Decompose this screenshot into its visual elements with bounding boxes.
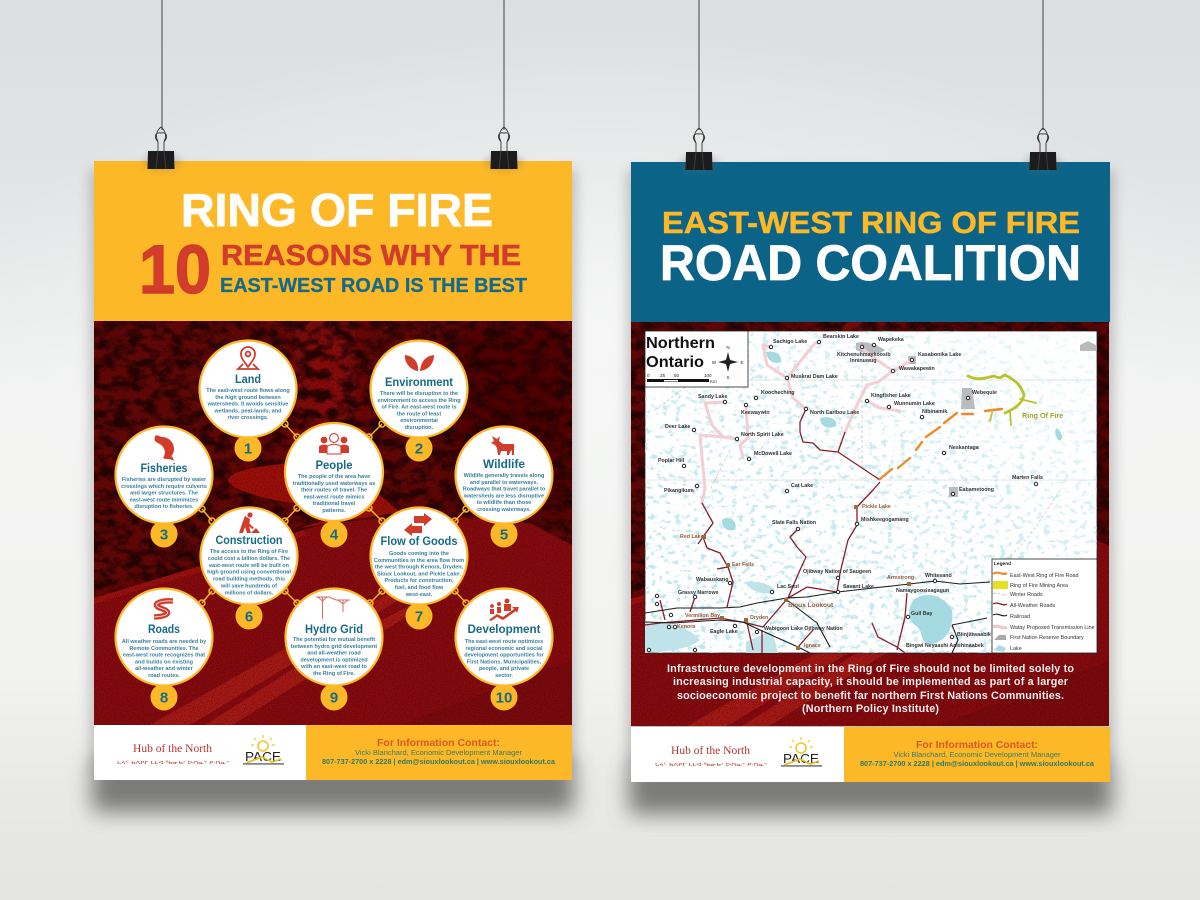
logo: pace — [781, 737, 822, 767]
poster 2 title: ROAD COALITION — [660, 235, 1081, 291]
community labels: Eabametoong — [959, 487, 994, 493]
map legend — [992, 559, 1097, 653]
poster 2 caption — [667, 663, 1074, 715]
contact text: 807-737-2700 x 2228 | edm@siouxlookout.ca | www.siouxlookout.ca — [322, 759, 555, 766]
reason 3: fisheries: and larger structures. The — [130, 491, 198, 497]
reason 4: people — [285, 423, 383, 547]
reason 2: environment: Environment — [385, 375, 453, 389]
community labels: Lac Seul — [777, 584, 799, 590]
scale bar: Km — [710, 379, 717, 384]
logo: hub of the north: ᒐᔦᑦ ᑲᐱᑭᒥ ᒪᒪᐊᐧᐦᑲᓂᑲᐣ ᐅᑎᓇᐤ ᑭᐧᑎᓇᐤ — [655, 762, 767, 768]
town labels: Sioux Lookout — [788, 602, 834, 609]
community labels: Wawakapewin — [899, 366, 935, 372]
reason 5: wildlife: Wildlife — [483, 457, 525, 471]
reason 10: development: development opportunities for — [464, 653, 545, 659]
community labels: Savant Lake — [843, 584, 874, 590]
reason 1: land: river crossings. — [228, 415, 269, 421]
poster 2: coalition — [631, 162, 1110, 782]
binder clips — [142, 127, 1063, 173]
reason 8: roads: Roads — [148, 622, 180, 636]
reason 9: hydro grid: with an east-west road to — [300, 664, 367, 670]
reason 9: hydro grid: Hydro Grid — [305, 622, 363, 636]
railroads — [645, 581, 990, 653]
reason 4: people: The people of the area have — [298, 474, 370, 480]
icon: construction worker — [239, 512, 260, 533]
reason 3: fisheries: 3 — [160, 526, 168, 544]
wall light glow — [0, 30, 1200, 630]
reason 6: construction: 6 — [245, 608, 253, 626]
map title box — [645, 331, 748, 387]
community labels: Bearskin Lake — [823, 334, 859, 340]
reason 5: wildlife: crossing waterways. — [477, 507, 531, 513]
reason 4: people: patterns. — [322, 508, 346, 514]
reason 6: construction: millions of dollars. — [225, 590, 274, 596]
reason 10: development: regional economic and social — [465, 646, 543, 652]
compass: S — [726, 375, 730, 380]
legend labels: First Nation Reserve Boundary — [1010, 635, 1084, 641]
poster 2 road photo — [631, 322, 1109, 726]
legend labels: Watay Proposed Transmission Line — [1010, 625, 1095, 631]
town labels: Red Lake — [680, 534, 704, 540]
reason 2: environment: of Fire. An east-west route is — [382, 405, 456, 411]
poster 2 caption: socioeconomic project to benefit far northern First Nations Communities. — [677, 690, 1064, 702]
reason 4: people: their routes of travel. The — [301, 488, 367, 494]
community labels: Kasabonika Lake — [918, 352, 961, 358]
reason 6: construction: will save hundreds of — [220, 584, 277, 590]
map title box: Northern — [646, 335, 715, 352]
reason 10: development — [456, 588, 552, 710]
connectors between circles — [199, 421, 469, 606]
poster 2 header band — [631, 162, 1110, 322]
reason 2: environment — [370, 340, 468, 461]
poster shadows — [90, 170, 1114, 814]
legend labels: Winter Roads — [1010, 592, 1043, 598]
poster 2 caption: increasing industrial capacity, it should be implemented as part of a larger — [673, 676, 1069, 688]
reason 7: flow of goods: Products for construction, — [384, 578, 454, 584]
east-west road — [880, 409, 1002, 479]
lake texture — [645, 331, 1097, 653]
reason 8: roads: 8 — [160, 690, 168, 706]
poster 1 footer — [94, 725, 572, 780]
reason 3: fisheries: Fisheries are disrupted by water — [122, 477, 207, 483]
poster 2 caption: Infrastructure development in the Ring of Fire should not be limited solely to — [667, 663, 1074, 675]
reason 10: development: people, and private — [479, 666, 529, 672]
reason 7: flow of goods: Communities in the area flow from — [374, 558, 464, 564]
poster 1 road photo — [94, 321, 572, 725]
reason 2: environment: There will be disruption to the — [380, 391, 458, 397]
scale bar: 25 — [660, 373, 666, 378]
community labels: Wabigoon Lake Ojibway Nation — [764, 626, 843, 632]
reason 1: land: wetlands, peat-lands, and — [214, 408, 281, 414]
town labels: Pickle Lake — [862, 504, 891, 510]
reason 5: wildlife: 5 — [500, 526, 508, 544]
community labels: Mishkeegogamang — [861, 517, 909, 523]
poster 1 header band — [94, 161, 572, 321]
reason 3: fisheries: Fisheries — [140, 461, 188, 475]
reason 4: people: 4 — [330, 526, 339, 544]
map legend: Legend — [994, 561, 1011, 567]
community labels: Marten Falls — [1012, 475, 1043, 481]
reason 3: fisheries: east-west route minimizes — [130, 497, 198, 503]
reason 2: environment: the route of least — [397, 411, 441, 417]
community labels: Sachigo Lake — [773, 339, 807, 345]
town labels: Ear Falls — [732, 562, 754, 568]
town labels: Ignace — [804, 643, 821, 649]
logo: hub of the north: Hub of the North — [671, 745, 750, 757]
reason 6: construction: road building methods, this — [213, 577, 285, 583]
reason 7: flow of goods: 7 — [415, 608, 423, 626]
town markers — [702, 505, 911, 650]
reason 6: construction: Construction — [216, 533, 282, 547]
logo: hub of the north: ᒐᔦᑦ ᑲᐱᑭᒥ ᒪᒪᐊᐧᐦᑲᓂᑲᐣ ᐅᑎᓇᐤ ᑭᐧᑎᓇᐤ — [117, 760, 229, 766]
community labels: Namaygoosisagagun — [896, 588, 949, 594]
logo: hub of the north — [117, 743, 229, 766]
logo: hub of the north — [655, 745, 767, 768]
community labels: Wunnumin Lake — [894, 401, 935, 407]
reason 2: environment: 2 — [415, 440, 423, 458]
reason 1: land: Land — [235, 372, 261, 386]
town labels: Vermilion Bay — [685, 613, 720, 619]
scale bar: 50 — [674, 373, 680, 378]
reason 5: wildlife: Wildlife generally travels along — [464, 473, 544, 479]
poster 1 title: 10 — [139, 231, 211, 308]
contact text — [322, 737, 555, 766]
community labels: Inninuwug — [850, 358, 876, 364]
community labels: Poplar Hill — [658, 458, 685, 464]
reason 6: construction — [200, 508, 298, 629]
reason 10: development: The east-west route optimizes — [465, 639, 543, 645]
contact text: For Information Contact: — [377, 737, 500, 749]
poster 2 caption: (Northern Policy Institute) — [802, 703, 939, 715]
legend labels: Railroad — [1010, 614, 1030, 620]
community labels: Muskrat Dam Lake — [791, 374, 838, 380]
reason 10: development: Development — [468, 622, 540, 636]
community labels: Wabauskang — [696, 577, 728, 583]
community labels: Neskantaga — [949, 445, 979, 451]
reason 5: wildlife: and parallel to waterways. — [470, 480, 539, 486]
reason 1: land: The east-west route flows along — [206, 388, 290, 394]
ring of fire label: Ring Of Fire — [1022, 411, 1063, 420]
community markers — [647, 340, 1038, 652]
poster 2 footer — [631, 727, 1110, 782]
reason 3: fisheries: disruption to fisheries. — [134, 504, 194, 510]
reason 1: land: watersheds. It avoids sensitive — [207, 402, 288, 408]
reason 9: hydro grid: the Ring of Fire. — [313, 671, 355, 677]
community labels: North Spirit Lake — [741, 432, 784, 438]
hanging strings — [162, 0, 1043, 130]
community labels: Pikangikum — [664, 488, 694, 494]
reason 7: flow of goods: fuel, and food flow — [395, 585, 444, 591]
all-weather roads — [645, 409, 907, 653]
reason 10: development: First Nations, Municipalities, — [467, 659, 542, 665]
map title box: Ontario — [646, 354, 704, 371]
contact text: Vicki Blanchard, Economic Development Manager — [355, 750, 523, 757]
reason 5: wildlife: watersheds are less disruptive — [463, 493, 544, 499]
reason 7: flow of goods: west-east. — [405, 592, 433, 598]
reason 10: development: 10 — [496, 690, 512, 706]
latitude lines — [645, 380, 1097, 480]
reason 7: flow of goods: Flow of Goods — [380, 534, 458, 548]
reason 6: construction: The access to the Ring of Fire — [210, 549, 288, 555]
legend labels: Lake — [1010, 646, 1022, 652]
reason 7: flow of goods: Goods coming into the — [389, 551, 449, 557]
poster 1 title: RING OF FIRE — [181, 184, 493, 236]
reason 4: people: east-west route mimics — [304, 494, 364, 500]
icon: people — [319, 434, 349, 454]
reason 9: hydro grid: between hydro grid development — [291, 644, 377, 650]
reason 5: wildlife — [456, 426, 552, 547]
reason 8: roads: and builds on existing — [135, 659, 193, 665]
compass: N — [726, 345, 730, 350]
poster 1 title: EAST-WEST ROAD IS THE BEST — [220, 275, 527, 297]
contact text: For Information Contact: — [916, 739, 1038, 751]
scale bar — [647, 373, 717, 384]
reason 10: development: sector. — [495, 673, 513, 679]
community labels: Whitesand — [925, 573, 952, 579]
reason 7: flow of goods — [370, 508, 468, 629]
reason 4: people: traditionally used waterways as — [293, 481, 375, 487]
map — [645, 331, 1097, 653]
reason 9: hydro grid: The potential for mutual benefit — [293, 637, 375, 643]
community labels: Biinjitiwaabik — [957, 632, 991, 638]
icon: hydro towers — [316, 597, 350, 619]
community labels: Eagle Lake — [710, 629, 738, 635]
reason 8: roads — [116, 588, 212, 710]
compass: W — [712, 360, 717, 365]
community labels: Nibinamik — [922, 409, 947, 415]
reason 5: wildlife: Roadways that travel parallel to — [463, 487, 546, 493]
reason 1: land: the high ground between — [215, 395, 281, 401]
scale bar: 100 — [704, 373, 712, 378]
boundary dashes — [655, 370, 1060, 560]
community labels: Grassy Narrows — [678, 590, 719, 596]
reserve areas — [856, 341, 1096, 497]
compass: E — [740, 360, 744, 365]
reason 9: hydro grid: 9 — [330, 690, 338, 706]
community labels: McDowell Lake — [754, 451, 792, 457]
reason 6: construction: high ground using conventional — [207, 570, 291, 576]
legend labels: East-West Ring of Fire Road — [1010, 573, 1079, 579]
contact text: 807-737-2700 x 2228 | edm@siouxlookout.ca | www.siouxlookout.ca — [860, 761, 1094, 768]
contact text — [860, 739, 1094, 768]
icon: two arrows — [404, 513, 432, 536]
major lakes — [645, 352, 1062, 653]
town labels — [677, 504, 914, 649]
icon: leaves — [405, 355, 434, 371]
poster 1 title: REASONS WHY THE — [221, 240, 521, 272]
icon: fish — [155, 435, 174, 461]
legend labels: All-Weather Roads — [1010, 603, 1055, 609]
reason 1: land — [200, 340, 296, 461]
poster 1: ten reasons — [94, 161, 572, 780]
reason 9: hydro grid: and all-weather road — [307, 651, 361, 657]
poster 2 title: EAST-WEST RING OF FIRE — [662, 205, 1080, 240]
community labels: Kitchenuhmaykoosib — [837, 352, 891, 358]
reason 9: hydro grid: development is optimized — [300, 657, 368, 663]
contact text: Vicki Blanchard, Economic Development Manager — [894, 752, 1061, 759]
community labels: Bingwi Neyaashi Anishinaabek — [906, 643, 984, 649]
reason 7: flow of goods: Sioux Lookout, and Pickle Lake. — [377, 571, 461, 577]
reason 3: fisheries — [116, 426, 212, 547]
community labels — [658, 334, 1043, 649]
community labels: Wapekeka — [878, 337, 904, 343]
poster 1 title — [139, 184, 527, 308]
reason 4: people: People — [316, 458, 353, 472]
reason 4: people: traditional travel — [313, 501, 356, 507]
reason 8: roads: All weather roads are needed by — [122, 639, 207, 645]
winter roads and transmission lines — [700, 343, 912, 503]
reason 8: roads: road routes. — [148, 673, 180, 679]
community labels: Cat Lake — [791, 483, 813, 489]
town labels: Kenora — [677, 624, 695, 630]
community labels: Keewaywin — [741, 410, 770, 416]
poster 2 title — [660, 205, 1081, 291]
reason 8: roads: Remote Communities. The — [129, 646, 199, 652]
icon: moose — [491, 436, 514, 455]
reason 9: hydro grid — [286, 588, 382, 710]
reason 8: roads: all-weather and winter — [135, 666, 194, 672]
logo: pace: PACE — [783, 751, 819, 766]
east-west road in mining area — [985, 409, 1002, 411]
reason 2: environment: environmental — [400, 418, 438, 424]
reason 7: flow of goods: the west through Kenora, Dryden, — [375, 565, 464, 571]
scale bar: 0 — [647, 373, 650, 378]
reason 5: wildlife: to wildlife than those — [477, 500, 531, 506]
community labels: Slate Falls Nation — [772, 520, 816, 526]
ring of fire mining area — [968, 375, 1036, 425]
icon: people on rising arrow — [489, 598, 519, 621]
community labels: Kingfisher Lake — [871, 393, 911, 399]
icon: winding road — [154, 601, 173, 617]
legend labels: Ring of Fire Mining Area — [1010, 583, 1068, 589]
community labels: North Caribou Lake — [810, 410, 859, 416]
icon: map pin — [238, 347, 258, 369]
town labels: Armstrong — [887, 575, 914, 581]
community labels: Gull Bay — [911, 611, 933, 617]
community labels: Koocheching — [761, 390, 795, 396]
logo: hub of the north: Hub of the North — [133, 743, 212, 755]
reason 6: construction: could cost a billion dollars. The — [208, 556, 290, 562]
reason 8: roads: east-west route recognizes that — [123, 653, 205, 659]
compass — [712, 345, 744, 380]
town labels: Dryden — [750, 615, 768, 621]
community labels: Ojibway Nation of Saugeen — [803, 569, 871, 575]
reason 3: fisheries: crossings which require culverts — [121, 484, 207, 490]
community labels: Sandy Lake — [698, 394, 727, 400]
legend labels — [1010, 573, 1095, 652]
reason 6: construction: east-west route will be built on — [209, 563, 290, 569]
reason 1: land: 1 — [244, 440, 252, 458]
community labels: Webequie — [972, 390, 997, 396]
reason 2: environment: environment to access the Ring — [377, 398, 461, 404]
community labels: Deer Lake — [665, 424, 690, 430]
reason 2: environment: disruption. — [405, 425, 434, 431]
logo: pace — [243, 735, 284, 765]
logo: pace: PACE — [245, 749, 281, 764]
legend swatches — [993, 573, 1008, 652]
